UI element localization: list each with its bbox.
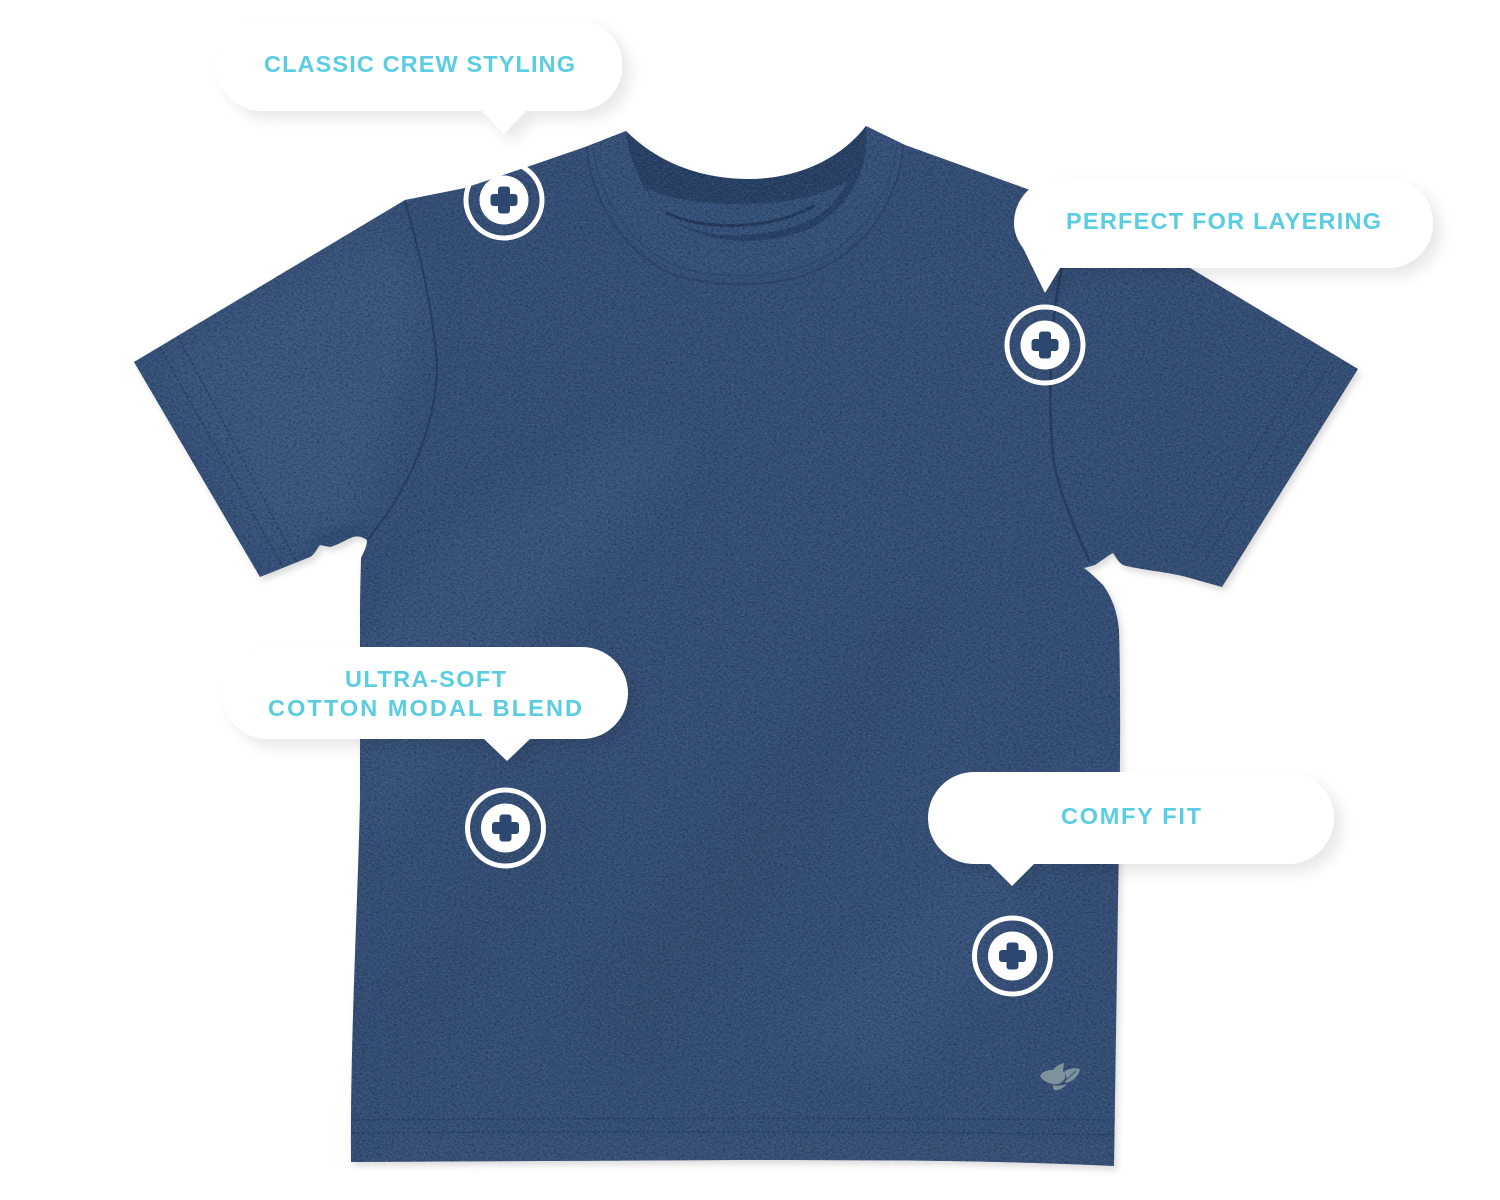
callout: comfy fit bbox=[928, 772, 1334, 886]
speech bubble bbox=[1014, 178, 1433, 293]
inside back of neck bbox=[626, 126, 867, 241]
fabric shading, neck and texture bbox=[120, 120, 1370, 1180]
shirt body silhouette bbox=[134, 126, 1358, 1166]
callout: perfect for layering bbox=[1014, 178, 1433, 293]
bottom hem stitching bbox=[352, 1118, 1116, 1135]
label second line: COTTON MODAL BLEND bbox=[268, 695, 582, 721]
label: ULTRA-SOFT bbox=[345, 666, 507, 692]
icon: plus hotspot, sleeve seam bbox=[1007, 307, 1083, 383]
left sleeve hem stitching bbox=[160, 336, 297, 567]
inner neck folded tape bbox=[647, 180, 848, 235]
label: CLASSIC CREW STYLING bbox=[264, 51, 575, 77]
callout: ultra-soft cotton modal blend bbox=[222, 647, 628, 761]
collar stitching bbox=[587, 145, 903, 284]
fabric grain light bbox=[120, 120, 1370, 1180]
collar inner stitching bbox=[593, 145, 897, 275]
icon: plus hotspot, fabric bbox=[468, 790, 544, 866]
icon: plus hotspot, shoulder bbox=[466, 162, 542, 238]
speech bubble bbox=[222, 647, 628, 761]
left underarm fold bbox=[310, 530, 362, 550]
speech bubble bbox=[217, 20, 623, 134]
right sleeve hem stitching bbox=[1190, 352, 1332, 562]
collar rib band bbox=[594, 126, 904, 145]
right armhole seam bbox=[1050, 268, 1090, 562]
fabric grain dark bbox=[120, 120, 1370, 1180]
logo: goldfish bbox=[1040, 1063, 1080, 1090]
speech bubble bbox=[928, 772, 1334, 886]
left armhole seam bbox=[367, 202, 437, 540]
label: PERFECT FOR LAYERING bbox=[1066, 208, 1381, 234]
callout: classic crew styling bbox=[217, 20, 623, 134]
t-shirt bbox=[120, 120, 1370, 1180]
inner neck fold line bbox=[667, 205, 815, 226]
label: COMFY FIT bbox=[1061, 803, 1202, 829]
icon: plus hotspot, fit bbox=[974, 918, 1050, 994]
